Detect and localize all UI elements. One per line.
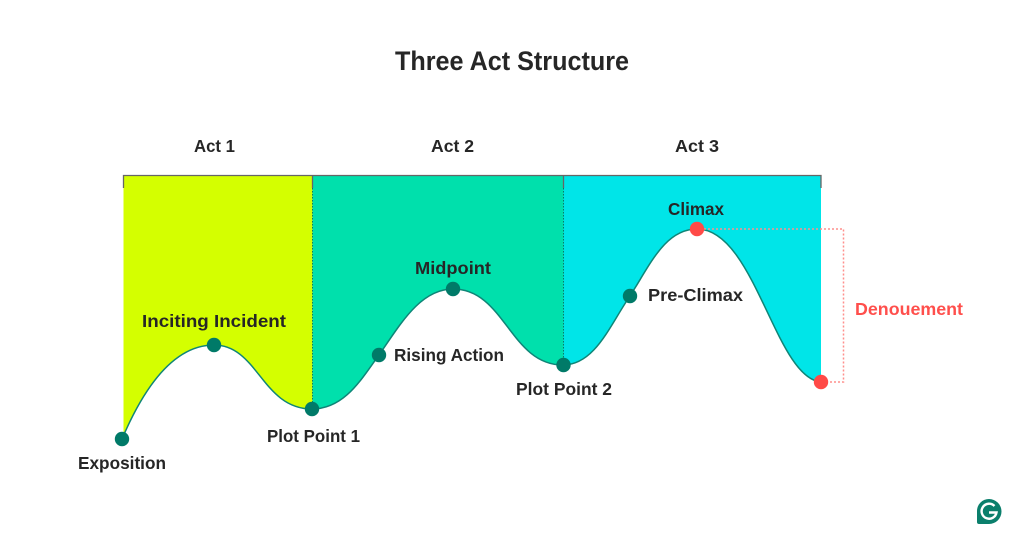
act dividers	[312, 188, 564, 409]
act labels: Act 1	[194, 136, 235, 156]
point labels: Inciting Incident	[142, 311, 286, 331]
denouement bracket	[704, 229, 844, 382]
point labels: Pre-Climax	[648, 285, 743, 305]
act labels	[194, 136, 719, 156]
act bracket	[124, 176, 821, 188]
panel: act 1 fill	[124, 175, 312, 436]
point labels: Midpoint	[415, 258, 491, 278]
point labels: Plot Point 1	[267, 426, 360, 446]
story curve	[122, 229, 821, 439]
point labels: Plot Point 2	[516, 379, 612, 399]
point labels	[78, 199, 743, 473]
title: Three Act Structure	[395, 46, 629, 76]
denouement label: Denouement	[855, 299, 963, 319]
panel: act 3 fill	[564, 175, 821, 382]
story points	[115, 282, 637, 446]
point labels: Exposition	[78, 453, 166, 473]
panel: act 2 fill	[312, 175, 564, 409]
point labels: Climax	[668, 199, 724, 219]
act labels: Act 2	[431, 136, 474, 156]
red points	[690, 222, 828, 389]
point labels: Rising Action	[394, 345, 504, 365]
act labels: Act 3	[675, 136, 719, 156]
icon: logo	[977, 499, 1001, 524]
